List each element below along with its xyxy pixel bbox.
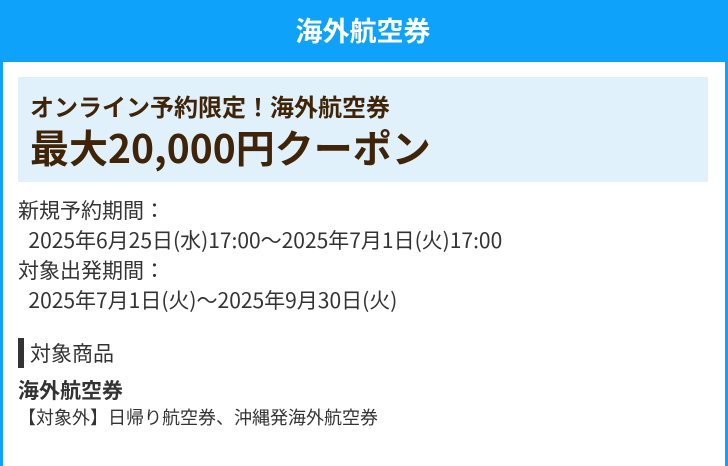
section heading: target products <box>18 338 114 368</box>
panel: coupon banner <box>18 77 708 182</box>
title: 海外航空券 <box>296 10 430 49</box>
booking period label: 新規予約期間： <box>18 195 165 225</box>
banner subheading: オンライン予約限定！海外航空券 <box>30 88 390 123</box>
departure period label: 対象出発期間： <box>18 255 165 285</box>
product name: 海外航空券 <box>18 375 123 405</box>
exclusion note: 【対象外】日帰り航空券、沖縄発海外航空券 <box>18 404 378 430</box>
heading accent bar <box>18 338 24 368</box>
banner headline: 最大20,000円クーポン <box>30 119 431 175</box>
header bar <box>0 0 728 62</box>
heading text: 対象商品 <box>30 338 114 368</box>
departure period dates: 2025年7月1日(火)〜2025年9月30日(火) <box>28 285 397 315</box>
booking period dates: 2025年6月25日(水)17:00〜2025年7月1日(火)17:00 <box>28 225 502 255</box>
